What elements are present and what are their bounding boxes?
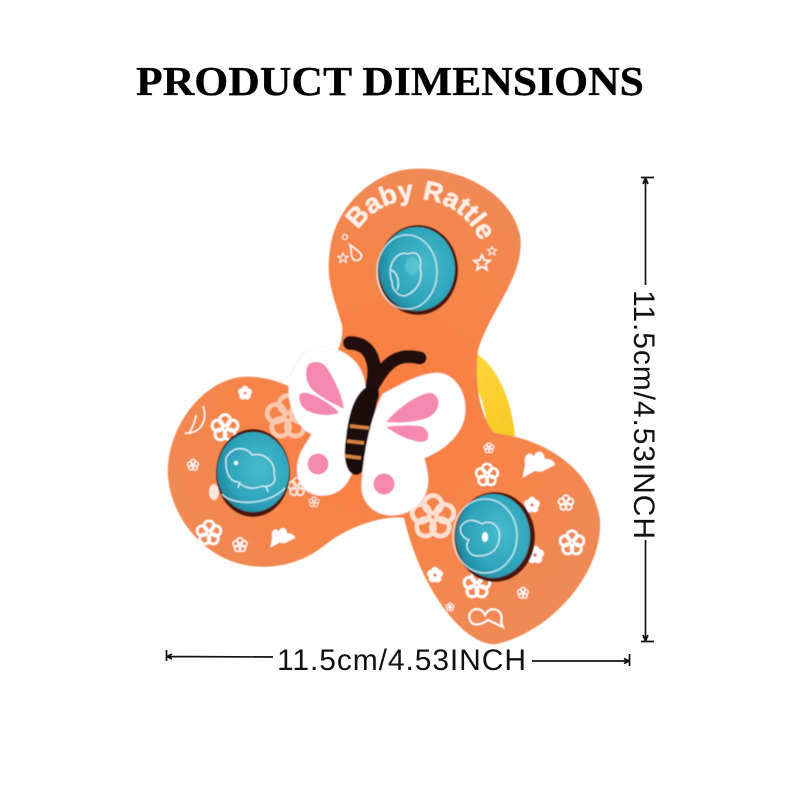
height top measure line: [641, 178, 654, 285]
left lobe flowers: [185, 386, 319, 551]
right wing: [362, 373, 465, 515]
width label: 11.5cm/4.53INCH: [277, 644, 526, 677]
height label: 11.5cm/4.53INCH: [627, 290, 660, 539]
wing pink marks: [299, 362, 439, 494]
top lobe label: [336, 180, 498, 272]
butterfly: [289, 343, 465, 515]
height dimension: [627, 178, 660, 642]
yellow suction base: [466, 352, 515, 436]
left antenna: [350, 343, 374, 388]
right antenna: [372, 357, 420, 388]
width left measure line: [166, 650, 273, 661]
body: [345, 386, 379, 475]
width right measure line: [532, 654, 630, 666]
left spinning ball: [216, 429, 290, 517]
baby rattle text: Baby Rattle: [344, 180, 492, 240]
width dimension: [166, 644, 630, 677]
right lobe flowers: [412, 443, 584, 627]
title: PRODUCT DIMENSIONS: [136, 58, 644, 104]
left wing: [289, 347, 366, 495]
right spinning ball: [453, 492, 535, 582]
product: baby rattle spinner toy: [167, 168, 601, 645]
stars and rattle icons: [338, 234, 496, 270]
body stripes: [345, 426, 369, 458]
height bottom measure line: [641, 540, 654, 642]
top spinning ball: [377, 225, 458, 315]
orange spinner body: [168, 169, 600, 644]
